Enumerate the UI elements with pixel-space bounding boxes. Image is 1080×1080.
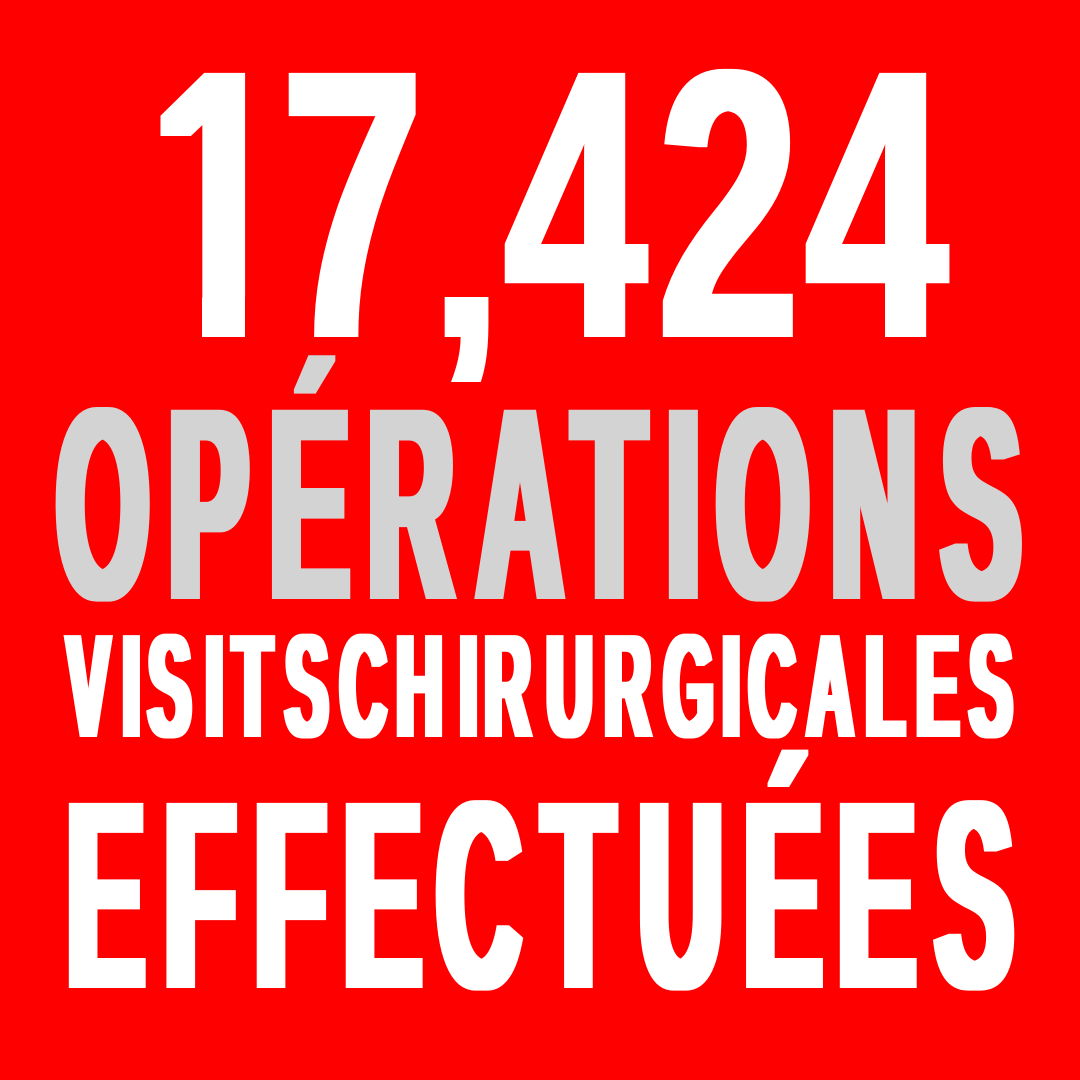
big number: 17,424: 17,424: [147, 0, 948, 418]
heading: EFFECTUÉES: EFFECTUÉES: [67, 745, 1013, 1045]
heading: OPÉRATIONS: OPÉRATIONS: [57, 350, 1021, 657]
subheading: VISITSCHIRURGICALES: VISITSCHIRURGICALES: [67, 604, 1012, 769]
